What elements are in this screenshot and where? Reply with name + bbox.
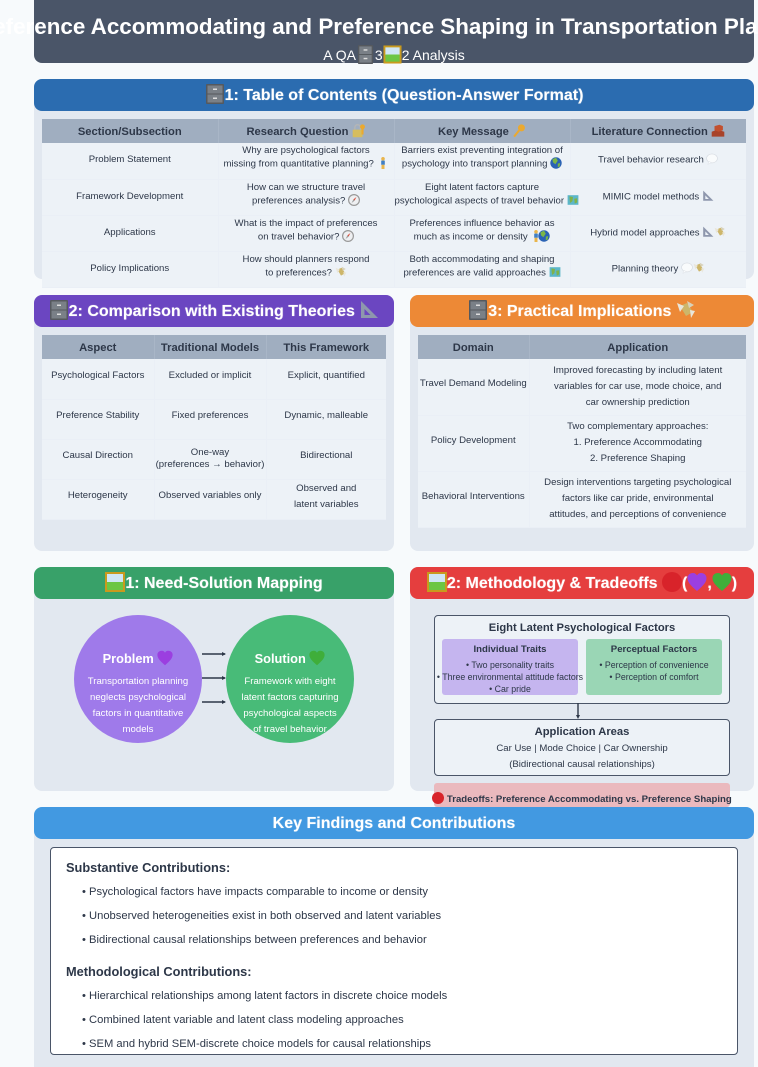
row: policy development: Two complementary approaches:: [567, 421, 708, 432]
table of contents table: Section/Subsection: [78, 126, 182, 138]
heading: need-solution mapping: [34, 567, 394, 599]
row: heterogeneity: [68, 482, 359, 510]
row: applications: Applications: [104, 226, 156, 238]
row: preference stability: Fixed preferences: [172, 410, 248, 421]
row: problem statement: psychology into transport planning: [402, 159, 547, 170]
panel: need-solution mapping: [34, 567, 394, 791]
problem text: models: [123, 724, 153, 735]
row: applications: [104, 218, 726, 242]
row: applications: Hybrid model approaches: [590, 227, 700, 238]
row: travel demand modeling: Improved forecasting by including latent: [553, 365, 722, 376]
box: contributions: [50, 847, 738, 1055]
individual traits heading: Individual Traits: [473, 644, 547, 655]
heading: methodological contributions: Methodological Contributions:: [66, 964, 252, 979]
arrows: problem to solution: [202, 652, 226, 704]
circle: problem: [74, 615, 202, 743]
callout: tradeoffs: [434, 783, 730, 807]
row: heterogeneity: Observed and: [296, 482, 356, 494]
solution text: psychological aspects: [243, 708, 337, 719]
heading: need-solution mapping: 1: Need-Solution Mapping: [125, 575, 323, 592]
heading: methodology and tradeoffs: [410, 567, 754, 599]
row: policy development: [431, 421, 708, 464]
row: psychological factors: Psychological Factors: [51, 370, 144, 381]
row: applications: What is the impact of preferences: [235, 218, 377, 229]
solution text: [241, 676, 339, 735]
row: psychological factors: Explicit, quantified: [288, 370, 365, 381]
row: preference stability: [56, 410, 368, 421]
row: behavioral interventions: [422, 477, 731, 520]
row: framework development: [76, 182, 714, 206]
perceptual factors heading: Perceptual Factors: [611, 644, 697, 655]
table of contents table: Literature Connection: [592, 127, 708, 139]
arrow: factors to application areas: [576, 703, 580, 719]
row: applications: Preferences influence behavior as: [409, 218, 555, 229]
comparison table: Traditional Models: [161, 342, 259, 354]
row: problem statement: Barriers exist preventing integration of: [401, 145, 563, 156]
row: framework development: How can we structure travel: [247, 182, 365, 193]
row: framework development: psychological aspects of travel behavior: [394, 195, 564, 206]
individual traits list: • Car pride: [489, 684, 531, 694]
table of contents table: [42, 119, 746, 288]
heading: substantive contributions: Substantive Contributions:: [66, 860, 230, 875]
row: policy implications: to preferences?: [265, 267, 332, 278]
heading: table of contents: 1: Table of Contents (Question-Answer Format): [225, 87, 583, 104]
heading: key findings: [34, 807, 754, 839]
row: preference stability: Dynamic, malleable: [284, 410, 368, 421]
row: travel demand modeling: Travel Demand Modeling: [420, 378, 527, 389]
row: causal direction: [63, 446, 352, 470]
row: problem statement: Why are psychological factors: [242, 145, 370, 156]
row: problem statement: Problem Statement: [89, 154, 171, 165]
comparison table: Aspect: [79, 342, 116, 354]
list: methodological contributions: • Combined latent variable and latent class modeling approaches: [82, 1014, 404, 1026]
row: policy implications: Planning theory: [612, 263, 678, 274]
subtitle: A QA 3 2 Analysis: [323, 47, 465, 63]
row: causal direction: (preferences → behavior): [156, 458, 264, 470]
application areas heading: Application Areas: [535, 726, 629, 738]
list: methodological contributions: [82, 990, 447, 1050]
implications table: [418, 335, 746, 528]
sub-box: individual traits: [442, 639, 578, 695]
implications table: Domain: [453, 342, 494, 354]
row: causal direction: Bidirectional: [300, 450, 352, 461]
row: heterogeneity: Heterogeneity: [68, 490, 128, 501]
row: travel demand modeling: variables for car use, mode choice, and: [554, 381, 721, 392]
row: policy implications: Policy Implications: [90, 262, 169, 274]
row: heterogeneity: Observed variables only: [159, 490, 261, 501]
row: framework development: Framework Development: [76, 190, 183, 202]
panel: methodology and tradeoffs: [410, 567, 754, 791]
table of contents table: Research Question: [246, 127, 348, 139]
panel: practical implications: [410, 295, 754, 551]
row: problem statement: missing from quantitative planning?: [223, 159, 374, 170]
row: problem statement: Travel behavior research: [598, 155, 704, 166]
row: behavioral interventions: factors like car pride, environmental: [562, 493, 713, 504]
row: policy implications: [90, 254, 704, 278]
application areas text: [496, 743, 668, 770]
implications table: Application: [607, 342, 668, 354]
problem text: Transportation planning: [88, 676, 188, 687]
row: applications: much as income or density: [414, 231, 528, 242]
problem text: [88, 676, 188, 735]
row: travel demand modeling: [420, 365, 722, 408]
perceptual factors list: • Perception of comfort: [609, 672, 699, 682]
panel: table of contents: [34, 79, 754, 279]
row: policy implications: How should planners respond: [243, 254, 369, 265]
comparison table: This Framework: [283, 342, 369, 354]
comparison table: [42, 335, 386, 520]
application areas text: (Bidirectional causal relationships): [509, 759, 655, 770]
circle: solution: [226, 615, 354, 743]
perceptual factors list: • Perception of convenience: [599, 660, 709, 670]
application areas text: Car Use | Mode Choice | Car Ownership: [496, 743, 668, 754]
tradeoffs text: Tradeoffs: Preference Accommodating vs. Preference Shaping: [447, 794, 732, 805]
list: substantive contributions: [82, 886, 441, 946]
row: preference stability: Preference Stability: [56, 410, 139, 421]
individual traits list: • Three environmental attitude factors: [437, 672, 583, 682]
header banner: [34, 0, 754, 63]
solution heading: Solution: [255, 651, 306, 666]
list: methodological contributions: • Hierarchical relationships among latent factors in discrete choice models: [82, 990, 447, 1002]
row: policy development: Policy Development: [431, 434, 516, 446]
list: substantive contributions: • Psychological factors have impacts comparable to income or density: [82, 886, 428, 898]
row: policy implications: Both accommodating and shaping: [409, 254, 555, 265]
row: policy development: 2. Preference Shaping: [590, 453, 685, 464]
heading: key findings: Key Findings and Contributions: [273, 815, 515, 832]
row: behavioral interventions: Design interventions targeting psychological: [544, 477, 731, 488]
box: application areas: [434, 719, 730, 776]
sub-box: perceptual factors: [586, 639, 722, 695]
row: psychological factors: Excluded or implicit: [169, 370, 251, 381]
solution text: latent factors capturing: [241, 692, 339, 703]
row: applications: on travel behavior?: [258, 231, 339, 242]
row: policy development: 1. Preference Accommodating: [573, 437, 702, 448]
heading: comparison: 2: Comparison with Existing Theories: [69, 303, 355, 320]
solution text: Framework with eight: [244, 676, 336, 687]
heading: methodology and tradeoffs: 2: Methodology & Tradeoffs ( , ): [447, 575, 737, 592]
panel: comparison with existing theories: [34, 295, 394, 551]
table of contents table: Key Message: [438, 127, 509, 139]
individual traits list: • Two personality traits: [466, 660, 554, 670]
heading: practical implications: [410, 295, 754, 327]
row: causal direction: One-way: [191, 446, 229, 458]
row: framework development: MIMIC model methods: [603, 191, 699, 202]
row: travel demand modeling: car ownership prediction: [586, 397, 690, 408]
row: behavioral interventions: Behavioral Interventions: [422, 490, 525, 502]
problem text: neglects psychological: [90, 692, 186, 703]
row: policy implications: preferences are valid approaches: [403, 267, 546, 278]
row: framework development: Eight latent factors capture: [425, 182, 539, 193]
list: substantive contributions: • Unobserved heterogeneities exist in both observed and latent variables: [82, 910, 441, 922]
problem heading: Problem: [103, 651, 154, 666]
heading: practical implications: 3: Practical Implications: [488, 303, 671, 320]
solution text: of travel behavior: [253, 724, 327, 735]
heading: table of contents: [34, 79, 754, 111]
row: heterogeneity: latent variables: [294, 498, 359, 510]
perceptual factors list: [599, 660, 709, 682]
row: behavioral interventions: attitudes, and perceptions of convenience: [549, 509, 726, 520]
individual traits list: [437, 660, 583, 694]
box: eight latent psychological factors: [434, 615, 730, 704]
heading: comparison: [34, 295, 394, 327]
problem text: factors in quantitative: [93, 708, 183, 719]
list: methodological contributions: • SEM and hybrid SEM-discrete choice models for causal relationships: [82, 1038, 431, 1050]
factors heading: Eight Latent Psychological Factors: [489, 622, 675, 634]
row: causal direction: Causal Direction: [63, 450, 133, 461]
panel: key findings and contributions: [34, 807, 754, 1067]
row: framework development: preferences analysis?: [252, 195, 345, 206]
list: substantive contributions: • Bidirectional causal relationships between preferences and behavior: [82, 934, 427, 946]
row: psychological factors: [51, 370, 365, 381]
row: problem statement: [89, 145, 718, 170]
